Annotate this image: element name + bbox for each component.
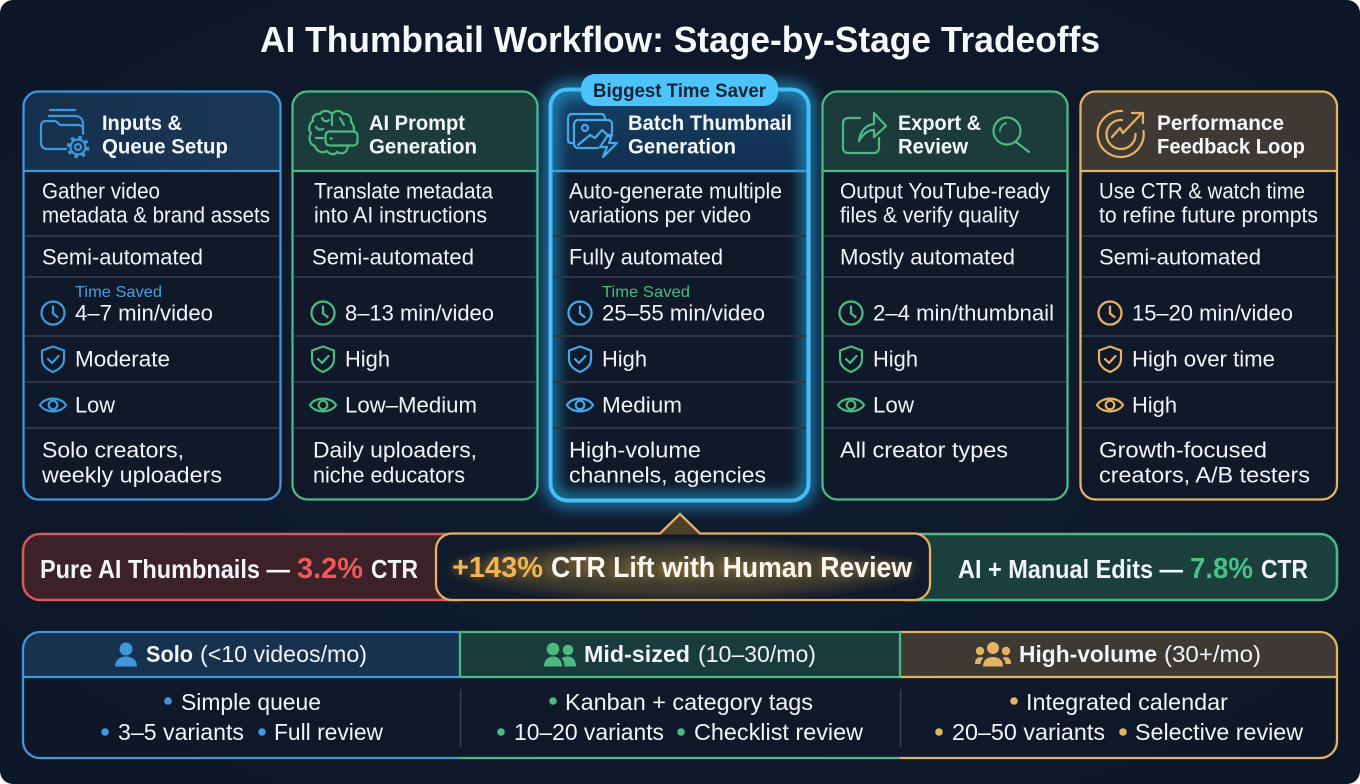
tier: mid-sized: Kanban + category tags [565,689,813,715]
tier: high-volume: Integrated calendar [1026,689,1228,715]
tier: high-volume [935,641,1303,745]
panel: ai plus manual ctr: AI + Manual Edits — [958,554,1183,584]
icon: share arrow [843,113,886,153]
best for: creators, A/B testers [1099,462,1310,488]
time saved: 25–55 min/video [602,300,765,326]
description [569,178,782,228]
tier: mid-sized: 10–20 variants [514,719,664,745]
best for: Solo creators, [42,438,184,462]
tier: high-volume: High-volume [1019,641,1157,667]
time saved: Time Saved [75,284,162,301]
visibility: Low [873,392,915,418]
icon: brain with prompt bar [309,111,358,154]
icon: person [115,642,137,666]
heading [369,111,477,158]
description [1099,178,1318,228]
quality: High [345,346,390,372]
tier: high-volume: 20–50 variants [952,719,1105,745]
callout: ctr lift with human review: CTR Lift with Human Review [551,552,912,584]
icon: feedback loop [1098,111,1144,157]
quality [312,346,390,372]
icon: two people [544,643,576,666]
heading: Feedback Loop [1157,134,1305,158]
description: to refine future prompts [1099,202,1318,228]
automation level: Semi-automated [1099,244,1261,270]
visibility: Low–Medium [345,392,477,418]
quality [840,346,918,372]
visibility [567,392,682,418]
best for: Growth-focused [1099,438,1267,462]
heading: Inputs & [102,111,182,135]
heading: Batch Thumbnail [628,111,792,135]
heading [628,111,792,158]
heading: Generation [628,134,736,158]
tier: mid-sized [497,641,863,745]
best for: Daily uploaders, [313,438,477,462]
quality: High [873,346,918,372]
panel: pure ai ctr: Pure AI Thumbnails — [40,554,290,584]
panel: performance feedback loop [1080,92,1337,500]
tier: solo [101,641,383,745]
panel: ai plus manual ctr [905,534,1337,600]
tier: high-volume: (30+/mo) [1164,641,1261,667]
visibility [838,392,915,418]
description: files & verify quality [840,202,1020,228]
panel: batch thumbnail generation [550,74,808,500]
panel: ai plus manual ctr: 7.8% [1190,553,1253,585]
description: into AI instructions [314,202,487,228]
heading [102,111,228,158]
tier: mid-sized: Mid-sized [584,641,690,667]
panel: ai prompt generation [292,92,538,500]
tier: mid-sized: Checklist review [694,719,863,745]
tier: solo: Solo [146,641,193,667]
best for [569,438,766,488]
time saved: 8–13 min/video [345,300,494,326]
description: Translate metadata [314,178,493,204]
best for: channels, agencies [569,462,766,488]
visibility: High [1132,392,1177,418]
best for: All creator types [840,438,1008,462]
description: Output YouTube-ready [840,178,1051,204]
icon: image stack with bolt [568,114,617,157]
panel: pure ai ctr: 3.2% [297,553,363,585]
icon: group of people [975,642,1011,666]
description [42,178,270,228]
quality: High over time [1132,346,1275,372]
visibility [1097,392,1177,418]
heading: AI Prompt [369,111,465,135]
time saved [568,284,765,326]
description [314,178,493,228]
description: Gather video [42,178,160,204]
tier: solo: (<10 videos/mo) [200,641,367,667]
callout: ctr lift with human review [435,514,930,600]
best for: weekly uploaders [41,462,222,488]
heading: Performance [1157,111,1284,135]
description [840,178,1051,228]
heading: Queue Setup [102,134,228,158]
tier: solo: Full review [274,719,383,745]
icon: folder with gear [41,110,88,156]
automation level: Mostly automated [840,244,1015,270]
badge: biggest time saver: Biggest Time Saver [593,80,766,102]
visibility [40,392,116,418]
quality: Moderate [75,346,170,372]
time saved: Time Saved [602,284,690,301]
quality [569,346,647,372]
time saved: 4–7 min/video [75,300,213,326]
description: metadata & brand assets [42,202,270,228]
best for [41,438,222,488]
heading: Review [898,134,968,158]
time saved [42,284,213,326]
automation level: Semi-automated [312,244,474,270]
best for: High-volume [569,438,701,462]
tier: mid-sized: (10–30/mo) [698,641,816,667]
panel: inputs and queue setup [24,92,280,500]
visibility: Medium [602,392,682,418]
icon: magnifier [994,118,1029,152]
description: variations per video [569,202,751,228]
panel: pure ai ctr: CTR [371,554,418,584]
panel: pure ai ctr [23,534,460,600]
best for [313,438,477,488]
tier: solo: Simple queue [181,689,321,715]
visibility: Low [75,392,116,418]
quality: High [602,346,647,372]
automation level: Semi-automated [42,244,203,270]
time saved: 2–4 min/thumbnail [873,300,1054,326]
time saved: 15–20 min/video [1132,300,1293,326]
panel: channel size comparison [23,632,1337,758]
heading [1157,111,1305,158]
best for [1099,438,1310,488]
panel: export and review [822,92,1068,500]
badge: biggest time saver [581,74,778,106]
tier: solo: 3–5 variants [118,719,244,745]
tier: high-volume: Selective review [1135,719,1303,745]
description: Use CTR & watch time [1099,178,1305,204]
heading: Export & [898,111,981,135]
title: AI Thumbnail Workflow: Stage-by-Stage Tradeoffs [260,19,1100,60]
callout: ctr lift with human review: +143% [452,552,543,584]
automation level: Fully automated [569,244,723,270]
panel: ai plus manual ctr: CTR [1261,554,1308,584]
description: Auto-generate multiple [569,178,782,204]
heading: Generation [369,134,477,158]
callout: ctr lift with human review: +143% CTR Lift with Human Review [452,552,912,584]
heading [898,111,981,158]
best for: niche educators [313,462,465,488]
